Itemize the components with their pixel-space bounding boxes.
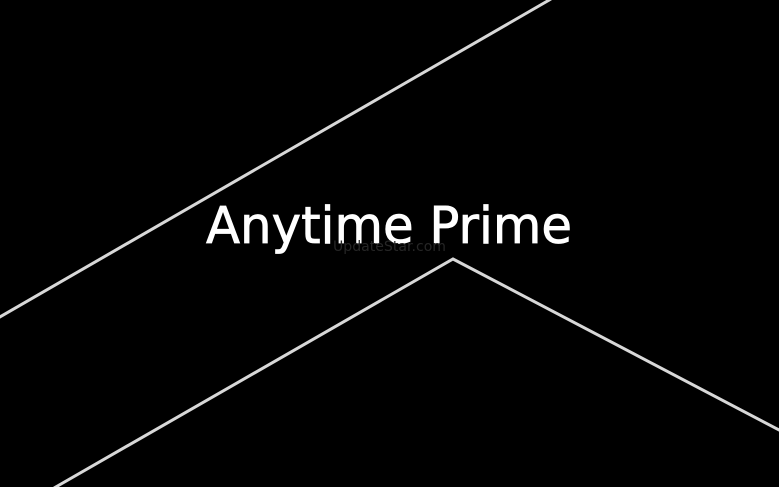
- lower chevron line: [54, 259, 779, 487]
- title: Anytime Prime: [206, 197, 572, 256]
- watermark: UpdateStar.com: [333, 239, 446, 255]
- upper diagonal line: [0, 0, 551, 318]
